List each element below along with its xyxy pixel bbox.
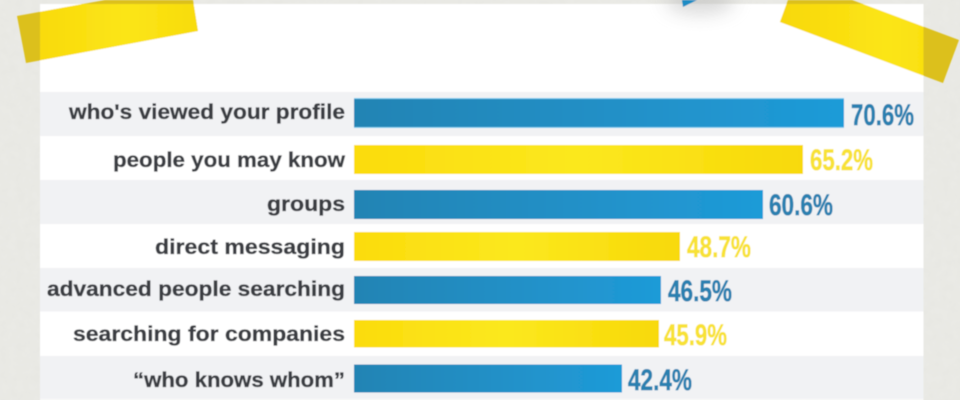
row: searching for companies [73, 319, 727, 352]
icon: blue arrow tip with shadow [666, 0, 734, 14]
tape: right [780, 0, 959, 83]
row: groups [40, 180, 924, 224]
row: who knows whom: “who knows whom” [133, 369, 345, 392]
row: people you may know: people you may know [113, 149, 346, 172]
row: people you may know [113, 144, 873, 177]
row: people you may know: 65.2% [810, 144, 873, 177]
row: searching for companies: 45.9% [664, 319, 727, 352]
row: who's viewed your profile [40, 92, 924, 136]
row: advanced people searching [40, 268, 924, 312]
row: who's viewed your profile: who's viewed your profile [68, 101, 345, 124]
row: direct messaging: direct messaging [155, 236, 345, 259]
row: who knows whom [40, 356, 924, 399]
row: advanced people searching: advanced people searching [47, 278, 345, 301]
row: groups: 60.6% [769, 189, 833, 222]
row: searching for companies: searching for companies [73, 323, 345, 346]
row: groups: groups [267, 193, 345, 216]
row: advanced people searching: 46.5% [668, 275, 732, 308]
row: direct messaging: 48.7% [687, 231, 751, 264]
tape: left [17, 0, 198, 63]
row: who knows whom: 42.4% [628, 364, 692, 397]
row: who's viewed your profile: 70.6% [851, 99, 914, 132]
row: direct messaging [155, 231, 751, 264]
